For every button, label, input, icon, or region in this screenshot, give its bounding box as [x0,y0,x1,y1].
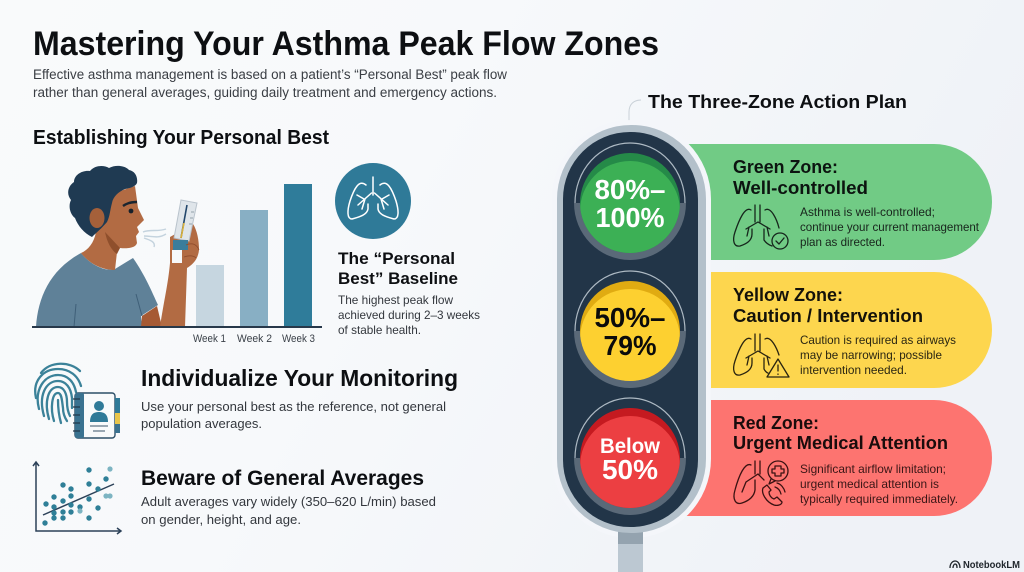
panel: red zone: Red Zone: [733,413,819,433]
light: yellow [574,271,686,389]
panel: red zone [680,400,992,516]
intro text: Effective asthma management is based on a patient’s “Personal Best” peak flow [33,67,507,82]
light: red: 50% [602,454,658,485]
panel: yellow zone [680,272,992,388]
individualize your monitoring [141,365,458,431]
personal best baseline text: of stable health. [338,323,421,337]
icon: lungs in teal circle [335,163,411,239]
panel: green zone: Green Zone: [733,157,838,177]
bar chart: weekly peak flow [32,184,322,345]
personal best baseline text: The highest peak flow [338,293,453,307]
beware of general averages: on gender, height, and age. [141,512,301,527]
bar chart: weekly peak flow: Week 2 [237,333,272,345]
traffic light [552,120,711,572]
panel: green zone: plan as directed. [800,235,885,249]
icon: lungs with medical cross and phone [734,461,788,505]
light: green: 100% [596,202,664,233]
arm and hand [160,224,199,327]
illustration: person using peak flow meter [36,166,199,327]
light: yellow: 79% [604,330,656,361]
light: red [574,398,686,516]
eye and brow [123,202,137,206]
bar chart: weekly peak flow: Week 3 [282,333,315,345]
peak flow meter [172,200,199,263]
personal best baseline text [338,249,480,337]
personal best baseline text: achieved during 2–3 weeks [338,308,480,322]
individualize your monitoring: Individualize Your Monitoring [141,365,458,391]
title: Mastering Your Asthma Peak Flow Zones [33,25,659,63]
panel: red zone: typically required immediately. [800,492,958,506]
panel: green zone [680,144,992,260]
light: yellow: 50%– [594,302,666,333]
individualize your monitoring: Use your personal best as the reference, not general [141,399,446,414]
panel: yellow zone: Caution is required as airways [800,333,956,347]
icon: lungs with warning [734,334,789,377]
beware of general averages: Beware of General Averages [141,467,424,490]
bar chart: weekly peak flow: Week 1 [193,333,226,345]
intro text: rather than general averages, guiding daily treatment and emergency actions. [33,85,497,100]
breath lines [143,229,166,247]
icon: lungs with check [734,205,788,249]
jaw shadow [105,232,120,254]
panel: yellow zone: Caution / Intervention [733,306,923,326]
light: green [574,143,686,261]
panel: green zone: Well-controlled [733,178,868,198]
light: red: Below [600,435,661,458]
panel: yellow zone: intervention needed. [800,363,907,377]
individualize your monitoring: population averages. [141,416,262,431]
shirt [36,253,158,327]
sleeve skin [141,306,162,327]
beware of general averages: Adult averages vary widely (350–620 L/min) based [141,494,436,509]
personal best baseline text: Best” Baseline [338,269,458,288]
traffic light pole [618,530,643,572]
panel: yellow zone: Yellow Zone: [733,285,843,305]
heading: establishing your personal best: Establishing Your Personal Best [33,127,329,149]
ear [90,208,104,228]
panel: red zone: Significant airflow limitation; [800,462,946,476]
icon: scatter plot [33,462,121,534]
beware of general averages [141,467,436,527]
personal best baseline text: The “Personal [338,249,455,268]
panel: green zone: Asthma is well-controlled; [800,205,935,219]
connector line [629,100,641,124]
icon: fingerprint and notebook [35,364,120,438]
neck and face [81,186,144,270]
hair [68,166,137,237]
panel: yellow zone: may be narrowing; possible [800,348,942,362]
panel: red zone: urgent medical attention is [800,477,939,491]
panel: green zone: continue your current management [800,220,980,234]
heading: three-zone action plan: The Three-Zone Action Plan [648,91,907,112]
light: green: 80%– [594,174,666,205]
panel: red zone: Urgent Medical Attention [733,433,948,453]
intro text [33,67,507,100]
